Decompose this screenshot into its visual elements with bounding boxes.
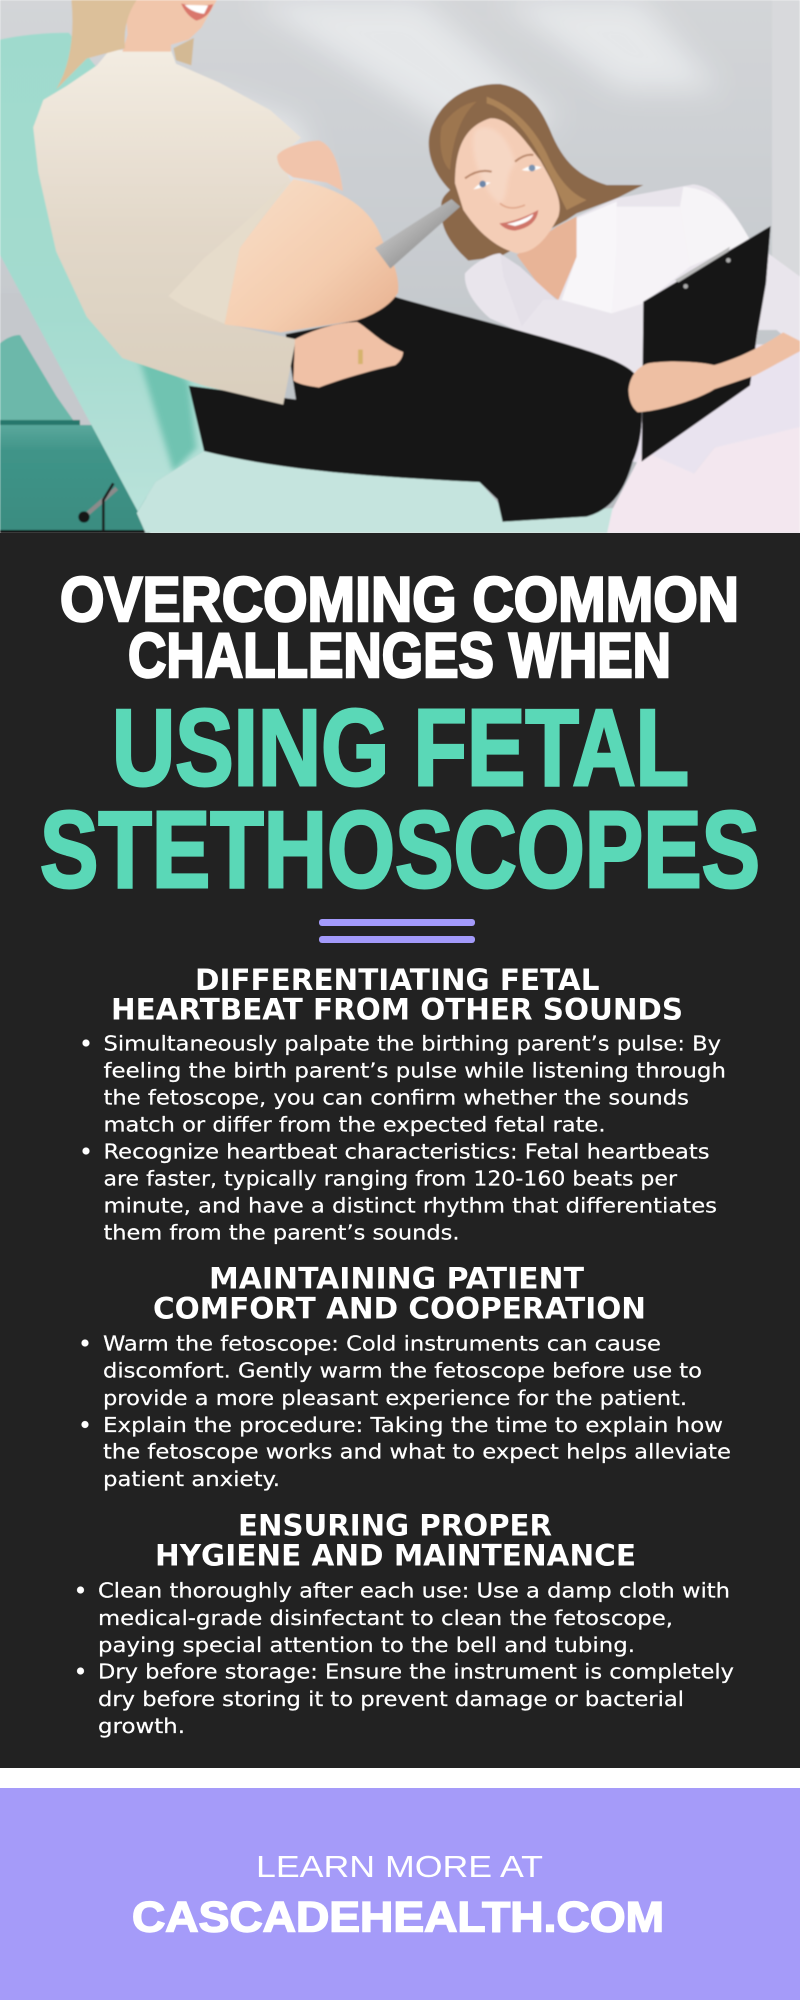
chair lever <box>78 483 117 532</box>
section 3 bullets: Dry before storage: Ensure the instrument is completely <box>98 1660 734 1684</box>
section 2 heading: COMFORT AND COOPERATION <box>153 1292 646 1326</box>
section 3: hygiene and maintenance <box>77 1509 734 1738</box>
patient legs in black trousers <box>189 296 642 522</box>
doctor's hand and arm <box>629 332 800 412</box>
patient's lower hand <box>293 322 403 387</box>
chair backrest <box>0 33 800 533</box>
collar <box>501 254 550 294</box>
wedding ring <box>358 350 363 364</box>
title: white lines: CHALLENGES WHEN <box>128 621 671 691</box>
patient's blonde hair <box>56 0 137 90</box>
patient's upper hand <box>277 141 343 191</box>
section 1 bullets: them from the parent’s sounds. <box>104 1220 460 1244</box>
footer: website: CASCADEHEALTH.COM <box>132 1894 664 1942</box>
section 1 bullets <box>82 1032 726 1244</box>
photo: pregnant patient and doctor with fetoscope <box>0 0 800 533</box>
section 1 heading <box>111 963 683 1026</box>
section 2 bullets: patient anxiety. <box>103 1467 280 1491</box>
title: white lines: OVERCOMING COMMON <box>60 565 739 635</box>
clipboard <box>642 226 771 462</box>
section 3 heading <box>155 1509 636 1573</box>
section 2: maintaining patient comfort <box>82 1262 731 1491</box>
chair seat <box>137 451 663 533</box>
section 2 heading: MAINTAINING PATIENT <box>209 1262 584 1296</box>
doctor's trousers <box>607 427 800 533</box>
dark content panel <box>0 533 800 1768</box>
doctor <box>429 84 800 387</box>
section 1 bullets: Simultaneously palpate the birthing parent’s pulse: By <box>104 1032 721 1056</box>
patient's neck and face <box>122 0 217 52</box>
section 2 bullets <box>82 1332 731 1491</box>
section 1 bullets: match or differ from the expected fetal rate. <box>104 1112 606 1136</box>
section 1 heading: HEARTBEAT FROM OTHER SOUNDS <box>111 992 683 1026</box>
footer band <box>0 1788 800 2000</box>
patient's sweater fold <box>200 306 227 322</box>
section 2 bullets: the fetoscope works and what to expect helps alleviate <box>103 1440 731 1464</box>
coat <box>464 184 800 360</box>
section 3 heading: HYGIENE AND MAINTENANCE <box>155 1539 636 1573</box>
neck <box>517 217 577 300</box>
fetoscope <box>375 199 460 269</box>
face <box>455 118 560 253</box>
hair <box>429 84 643 261</box>
section 1 bullets: are faster, typically ranging from 120-160 beats per <box>104 1166 678 1190</box>
section 1 bullets: feeling the birth parent’s pulse while listening through <box>104 1058 726 1082</box>
section 3 bullets: medical-grade disinfectant to clean the fetoscope, <box>98 1606 673 1630</box>
chair base in the background <box>0 334 150 533</box>
double-line divider <box>319 919 475 943</box>
section 1 bullets: minute, and have a distinct rhythm that differentiates <box>104 1194 717 1218</box>
footer: learn more at: LEARN MORE AT <box>256 1849 543 1884</box>
section 3 bullets: growth. <box>98 1714 185 1738</box>
title: green lines <box>40 687 760 911</box>
section 2 bullets: provide a more pleasant experience for the patient. <box>103 1386 687 1410</box>
doctor's lower coat <box>632 344 800 474</box>
section 3 bullets: dry before storing it to prevent damage or bacterial <box>98 1687 684 1711</box>
section 1 bullets: the fetoscope, you can confirm whether the sounds <box>104 1086 689 1110</box>
section 2 heading <box>153 1262 646 1326</box>
wall background <box>0 0 800 533</box>
section 2 bullets: Warm the fetoscope: Cold instruments can cause <box>103 1332 661 1356</box>
section 3 bullets: paying special attention to the bell and tubing. <box>98 1633 635 1657</box>
section 1 heading: DIFFERENTIATING FETAL <box>195 963 600 997</box>
section 3 heading: ENSURING PROPER <box>238 1509 552 1543</box>
section 3 bullets <box>77 1579 734 1738</box>
patient's sweater <box>33 50 306 405</box>
section 3 bullets: Clean thoroughly after each use: Use a damp cloth with <box>98 1579 730 1603</box>
section 1 bullets: Recognize heartbeat characteristics: Fetal heartbeats <box>104 1140 710 1164</box>
section 2 bullets: discomfort. Gently warm the fetoscope before use to <box>103 1359 702 1383</box>
belly <box>224 179 398 332</box>
section 2 bullets: Explain the procedure: Taking the time to explain how <box>103 1413 723 1437</box>
title: white lines <box>60 565 739 691</box>
section 1: differentiating fetal heartbeat <box>82 963 726 1244</box>
